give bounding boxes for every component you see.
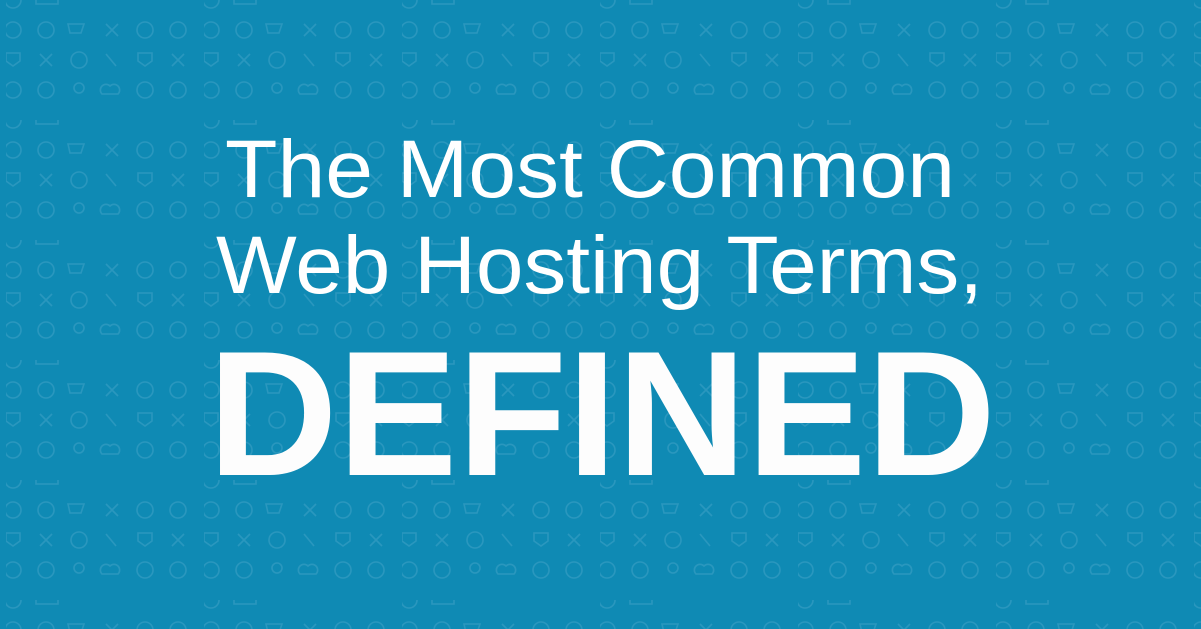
title line 2: Web Hosting Terms, (216, 220, 983, 311)
title line 1: The Most Common (225, 124, 955, 215)
headline: DEFINED: DEFINED (208, 314, 996, 513)
